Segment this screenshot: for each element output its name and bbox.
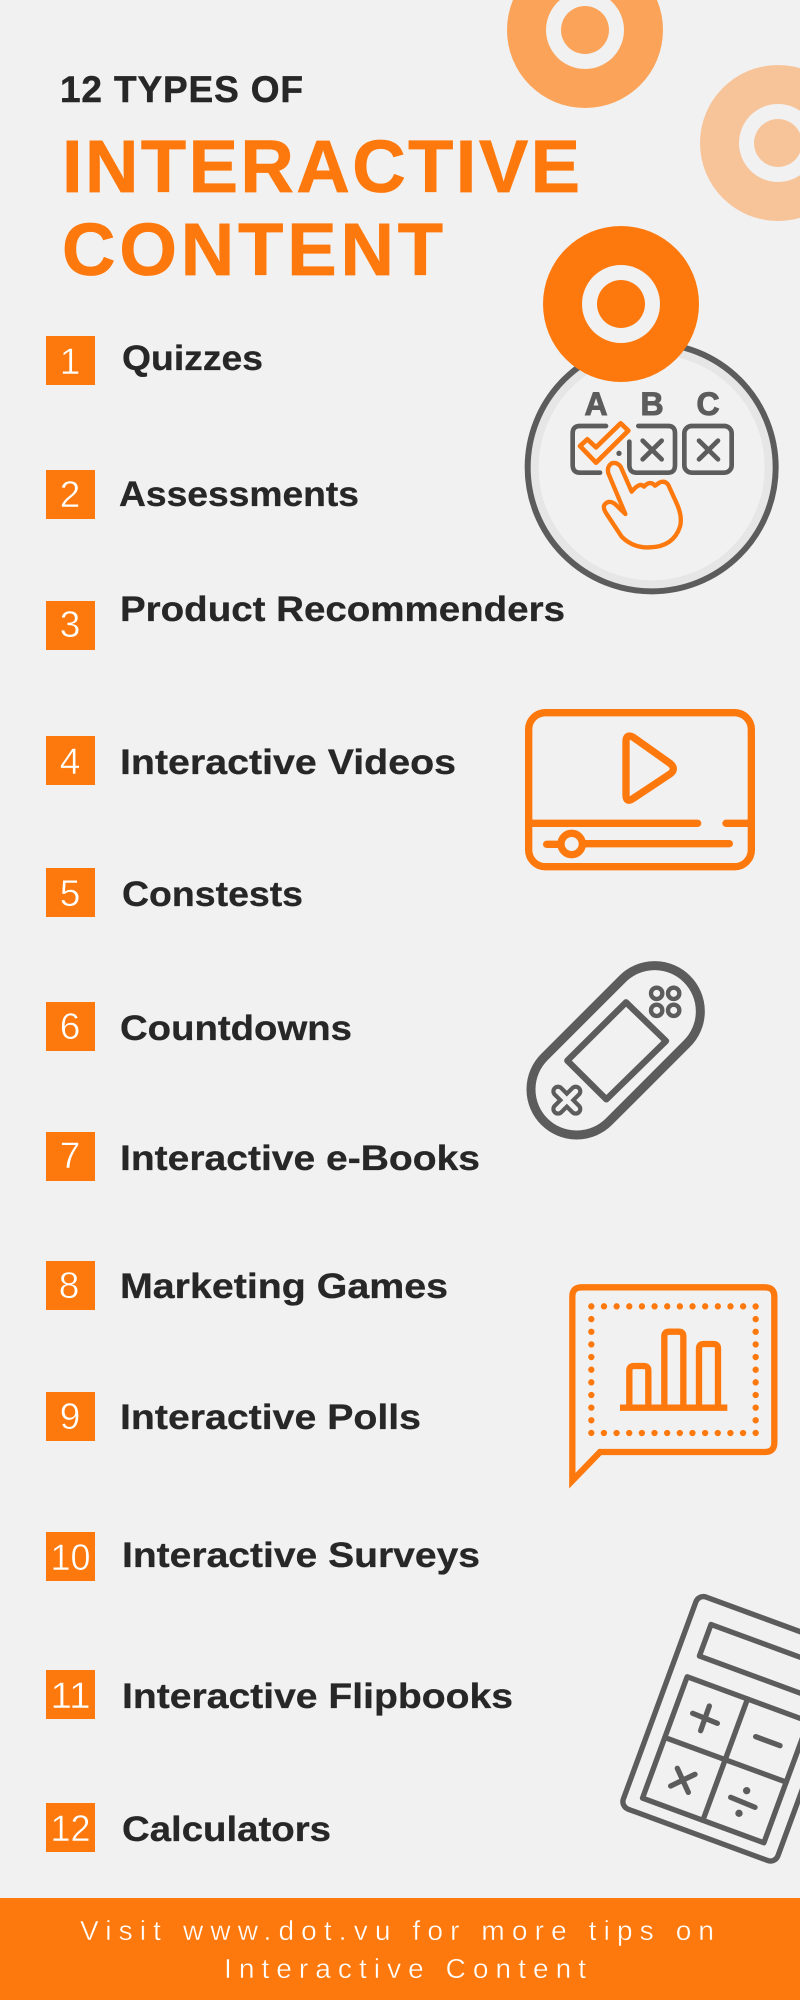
list item 3: 3	[60, 604, 80, 645]
list item 12	[46, 1803, 331, 1852]
list item 5	[46, 868, 303, 917]
list item 5: Constests	[122, 874, 303, 914]
list item 8: 8	[59, 1265, 79, 1306]
list item 9: Interactive Polls	[120, 1397, 421, 1437]
icon: quiz with hand: B	[640, 386, 664, 422]
icon: poll speech bubble with bar chart	[572, 1287, 774, 1481]
list item 4	[46, 736, 456, 785]
list item 6: 6	[60, 1006, 80, 1047]
list item 7: Interactive e-Books	[120, 1138, 480, 1178]
list item 6: Countdowns	[120, 1008, 352, 1048]
list item 3	[46, 589, 565, 650]
icon: video player	[529, 713, 751, 867]
list item 2: 2	[60, 474, 80, 515]
icon: handheld game console	[512, 947, 719, 1154]
list item 3: Product Recommenders	[120, 589, 565, 629]
list item 1: Quizzes	[122, 338, 263, 378]
list item 10: Interactive Surveys	[122, 1535, 480, 1575]
list item 6	[46, 1002, 352, 1051]
list item 2	[46, 470, 359, 519]
decorative target circle: over quiz icon	[543, 226, 699, 382]
list item 10	[46, 1532, 480, 1581]
footer banner	[0, 1898, 800, 2000]
list item 2: Assessments	[119, 474, 359, 514]
decorative target circle: right	[700, 65, 800, 221]
list item 7: 7	[60, 1135, 80, 1176]
list item 8: Marketing Games	[120, 1266, 448, 1306]
list item 12: Calculators	[122, 1809, 331, 1849]
footer text line 1: Visit www.dot.vu for more tips on	[80, 1915, 714, 1946]
list item 12: 12	[50, 1808, 90, 1849]
list item 9: 9	[60, 1396, 80, 1437]
title: content: CONTENT	[62, 208, 443, 291]
list item 7	[46, 1132, 480, 1181]
icon: calculator	[621, 1594, 800, 1863]
list item 11: 11	[50, 1675, 90, 1716]
list item 4: Interactive Videos	[120, 742, 456, 782]
list item 4: 4	[60, 741, 80, 782]
list item 10: 10	[50, 1537, 90, 1578]
heading: 12 types of: 12 TYPES OF	[60, 69, 303, 110]
list item 1: 1	[60, 341, 80, 382]
list item 9	[46, 1392, 421, 1441]
icon: quiz with hand	[528, 343, 776, 591]
title: interactive: INTERACTIVE	[62, 125, 580, 208]
footer text line 2: Interactive Content	[224, 1953, 586, 1984]
icon: quiz with hand: A	[584, 386, 608, 422]
list item 11: Interactive Flipbooks	[122, 1676, 513, 1716]
list item 1	[46, 336, 263, 385]
list item 8	[46, 1261, 448, 1310]
list item 11	[46, 1670, 513, 1719]
icon: quiz with hand: C	[696, 386, 720, 422]
list item 5: 5	[60, 873, 80, 914]
decorative target circle: top	[507, 0, 663, 108]
